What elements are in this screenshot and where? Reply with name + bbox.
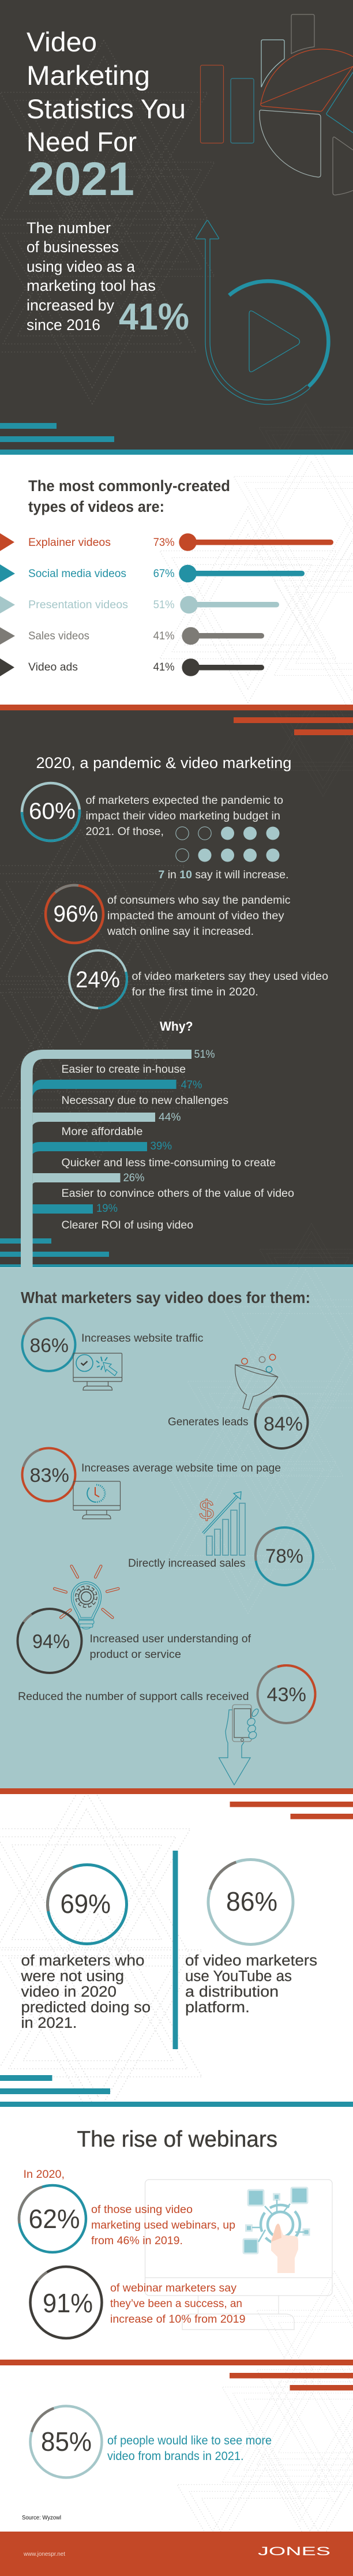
intro text: The number	[27, 219, 111, 237]
band: teal	[0, 450, 353, 455]
title: Statistics You	[27, 93, 186, 124]
text: Generates leads	[168, 1416, 248, 1428]
row: social: Social media videos	[28, 568, 126, 580]
text: Increased user understanding of	[90, 1633, 251, 1645]
stat 96%: 96%	[53, 901, 98, 927]
stat 60%	[20, 781, 82, 843]
bar 44%: More affordable	[61, 1126, 143, 1138]
footer	[0, 2532, 353, 2576]
heading	[28, 477, 230, 515]
band: teal	[0, 1264, 353, 1267]
text: first time: of video marketers say they used video	[132, 971, 328, 983]
divider	[173, 1851, 178, 2049]
stat 84%: 84%	[264, 1413, 303, 1435]
bar 51%	[21, 1049, 215, 1268]
stat 83%	[16, 1441, 82, 1508]
text: In 2020,	[23, 2169, 65, 2181]
bar 39%: 39%	[150, 1140, 172, 1152]
text: of video marketers	[185, 1953, 317, 1969]
website: www.jonespr.net	[23, 2551, 65, 2558]
text: of those using video	[91, 2204, 193, 2216]
text: first time	[132, 971, 328, 998]
bar 39%: Quicker and less time-consuming to create	[61, 1157, 276, 1169]
stat 94%: 94%	[32, 1631, 70, 1653]
intro text	[27, 219, 156, 334]
text	[107, 2434, 272, 2463]
icon: monitor with cursor	[73, 1353, 122, 1390]
text: increase of 10% from 2019	[110, 2313, 246, 2326]
stat 43%: 43%	[266, 1684, 306, 1706]
icon: play button with arrow	[183, 220, 353, 427]
decorative bars	[0, 1238, 109, 1257]
text: Increases average website time on page	[81, 1462, 281, 1474]
text: budget: of marketers expected the pandemic to	[85, 795, 283, 807]
text: in 2021.	[21, 2015, 77, 2031]
bar 26%: Easier to convince others of the value of video	[61, 1188, 294, 1200]
bar 39%	[33, 1140, 276, 1169]
text: budget: 2021. Of those,	[85, 826, 164, 838]
stat 41%: 41%	[119, 295, 189, 338]
text: platform.	[185, 2000, 250, 2016]
decorative bars	[230, 2373, 353, 2390]
icon: light bulb with gear	[54, 1566, 118, 1629]
heading: The rise of webinars	[77, 2127, 277, 2152]
row: explainer: 73%	[153, 537, 175, 549]
icon: outline bars and pie	[201, 14, 353, 195]
row: sales	[0, 627, 264, 645]
bar 26%: 26%	[123, 1172, 145, 1184]
bar 19%	[33, 1203, 193, 1231]
text: use YouTube as	[185, 1968, 292, 1985]
stat 24%	[63, 944, 133, 1014]
intro text: since 2016	[27, 316, 100, 334]
stat 86% traffic	[14, 1311, 83, 1379]
stat 24%: 24%	[76, 967, 120, 993]
bar 19%: 19%	[96, 1203, 118, 1215]
stat 91%: 91%	[43, 2288, 93, 2318]
icon: sales chart: $	[199, 1495, 214, 1525]
bar 44%	[33, 1111, 181, 1138]
band: red	[0, 1788, 353, 1794]
text: Directly increased sales	[128, 1557, 246, 1570]
row: social	[0, 564, 305, 582]
panel: closing stat	[0, 2331, 353, 2576]
text	[110, 2282, 246, 2326]
icon: phone in hand with down arrow	[219, 1705, 260, 1785]
title: Video	[27, 27, 97, 57]
decorative bars	[230, 1802, 353, 1819]
panel: what video does	[0, 1256, 353, 1788]
row: presentation: Presentation videos	[28, 599, 128, 611]
stat 85%	[22, 2398, 110, 2486]
text: video from brands in 2021.	[107, 2450, 243, 2463]
stat 85%: 85%	[41, 2427, 92, 2457]
band: teal	[0, 2102, 353, 2107]
icon: hand touching network	[243, 2188, 309, 2273]
heading: types of videos are:	[28, 498, 164, 515]
text: video in 2020	[21, 1984, 117, 2000]
row: presentation	[0, 596, 279, 613]
row: explainer: Explainer videos	[28, 537, 111, 549]
bar 51%: 51%	[194, 1049, 215, 1061]
intro text: increased by	[27, 297, 114, 314]
bar 26%	[33, 1172, 294, 1200]
text: a distribution	[185, 1984, 279, 2000]
heading: The most commonly-created	[28, 477, 230, 495]
source: Source: Wyzowl	[22, 2515, 61, 2521]
row: video ads: Video ads	[28, 661, 78, 673]
text: consumers	[107, 894, 291, 938]
text: 7 in 10: 7 in 10 say it will increase.	[158, 869, 289, 881]
year 2021: 2021	[28, 153, 134, 205]
bar 19%: Clearer ROI of using video	[61, 1219, 193, 1231]
text: they’ve been a success, an	[110, 2298, 242, 2310]
row: explainer	[0, 533, 333, 551]
stat 78%: 78%	[265, 1545, 303, 1567]
stat 78%	[251, 1523, 317, 1589]
heading: What marketers say video does for them:	[21, 1289, 310, 1306]
logo: JONES	[258, 2545, 331, 2558]
row: video ads	[0, 658, 264, 676]
decorative bars	[0, 423, 114, 442]
stat 60%: 60%	[29, 799, 76, 824]
stat 43%	[250, 1658, 323, 1731]
intro text: using video as a	[27, 258, 136, 275]
decorative bars	[234, 717, 353, 735]
title: Need For	[27, 126, 137, 157]
stat 86% youtube	[198, 1849, 303, 1955]
row: social: 67%	[153, 568, 175, 580]
intro text: of businesses	[27, 238, 119, 256]
row: sales: Sales videos	[28, 630, 89, 642]
text: product or service	[90, 1649, 181, 1661]
bar 44%: 44%	[159, 1111, 181, 1124]
text	[90, 1633, 251, 1661]
text: predicted doing so	[21, 2000, 151, 2016]
stat 69%	[42, 1859, 133, 1950]
title	[27, 27, 186, 157]
stat 86% youtube: 86%	[226, 1886, 277, 1916]
panel: predictions	[0, 1777, 353, 2129]
bar 47%: 47%	[181, 1079, 202, 1091]
bar 51%: Easier to create in-house	[61, 1064, 186, 1076]
bar 47%: Necessary due to new challenges	[61, 1095, 228, 1107]
band: red	[0, 705, 353, 710]
text: consumers: of consumers who say the pandemic	[107, 894, 291, 907]
text: of people would like to see more	[107, 2434, 272, 2447]
text	[91, 2204, 235, 2247]
stat 62%	[14, 2181, 91, 2257]
row: video ads: 41%	[153, 661, 175, 673]
icon: sales chart	[199, 1492, 245, 1555]
title: Marketing	[27, 60, 150, 91]
panel: most common types	[0, 437, 353, 714]
stat 94%	[5, 1596, 95, 1686]
heading: 2020, a pandemic & video marketing	[36, 754, 292, 772]
stat 86% traffic: 86%	[30, 1335, 69, 1357]
panel: webinars	[0, 2107, 353, 2444]
text: from 46% in 2019.	[91, 2235, 183, 2247]
text: marketing used webinars, up	[91, 2219, 235, 2231]
stat 83%: 83%	[30, 1465, 69, 1487]
stat 91%	[16, 2252, 116, 2353]
icon: faint monitor	[145, 2180, 332, 2330]
row: sales: 41%	[153, 630, 175, 642]
text: Increases website traffic	[81, 1332, 203, 1345]
decorative bars	[0, 2075, 110, 2094]
text: first time: for the first time in 2020.	[132, 986, 258, 998]
stat 84%	[248, 1388, 315, 1456]
stat 69%: 69%	[60, 1889, 111, 1919]
text: of webinar marketers say	[110, 2282, 237, 2294]
stat 62%: 62%	[29, 2204, 80, 2234]
text: consumers: impacted the amount of video they	[107, 910, 284, 922]
text: budget	[85, 795, 283, 838]
text: consumers: watch online say it increased.	[107, 926, 254, 938]
chart: why bars	[21, 1049, 294, 1268]
intro text: marketing tool has	[27, 277, 156, 294]
text	[20, 1953, 151, 2031]
stat 96%	[33, 873, 115, 955]
panel: pandemic	[0, 681, 353, 1339]
heading: why: Why?	[160, 1019, 193, 1034]
row: presentation: 51%	[153, 599, 175, 611]
bar 47%	[33, 1079, 228, 1107]
band: red	[0, 2360, 353, 2365]
panel: hero	[0, 0, 353, 508]
text: were not using	[20, 1968, 124, 1985]
text: budget: impact their video marketing budget in	[85, 810, 280, 822]
text: of marketers who	[21, 1953, 144, 1969]
text	[185, 1953, 317, 2016]
text: Reduced the number of support calls received	[18, 1691, 249, 1703]
icon: 7 in 10 dots	[176, 826, 279, 862]
icon: funnel	[235, 1354, 278, 1410]
icon: monitor with clock	[73, 1481, 120, 1519]
